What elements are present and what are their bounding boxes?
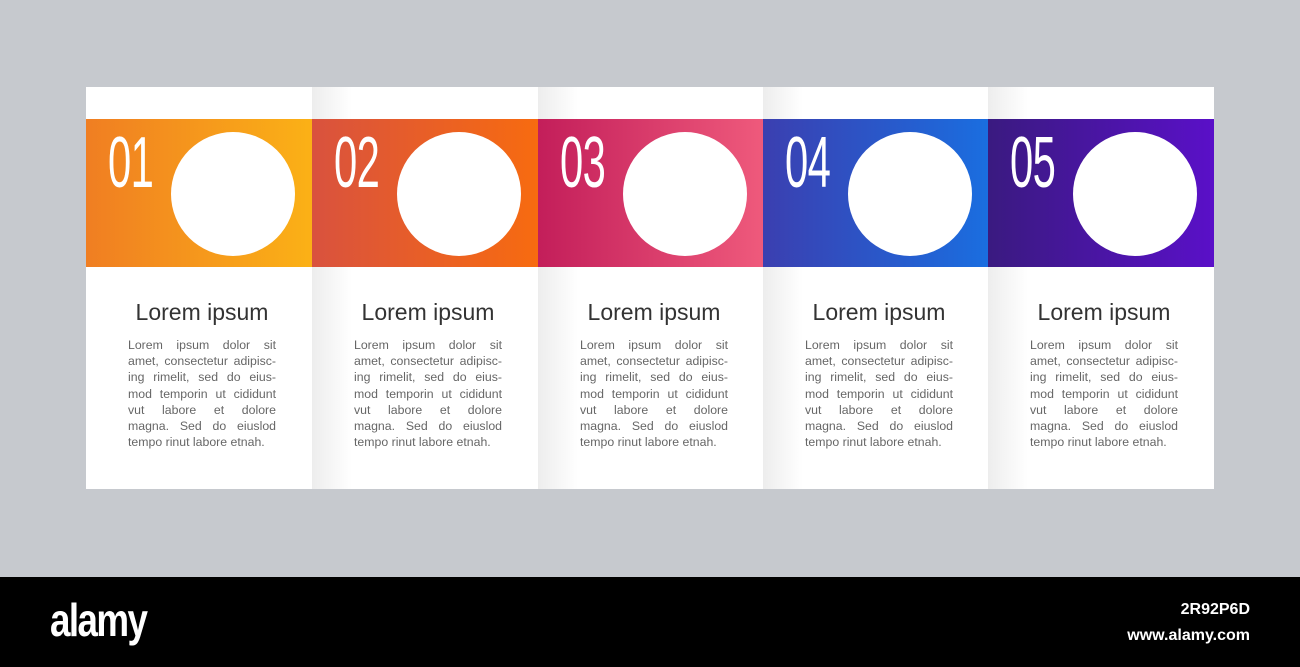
panel 4 (763, 87, 989, 489)
band 1: 01 (108, 123, 153, 203)
footer bar (0, 577, 1300, 667)
image id: www.alamy.com (1127, 627, 1250, 644)
band 2 (312, 119, 538, 267)
band 2: 02 (334, 123, 379, 203)
band 3 (538, 119, 764, 267)
panel 2 (312, 87, 538, 489)
heading 4: Lorem ipsum (813, 299, 945, 325)
image id: 2R92P6D (1181, 601, 1250, 618)
panel 3 (538, 87, 764, 489)
band 4 (763, 119, 989, 267)
heading 5: Lorem ipsum (1038, 299, 1170, 325)
text 1: Lorem ipsum dolor sit amet, consectetur adipisc-ing rimelit, sed do eius-mod temporin ut cididunt vut labore et dolore magna. Sed do eiuslod tempo rinut labore etnah. (128, 338, 276, 449)
text 4: Lorem ipsum dolor sit amet, consectetur adipisc-ing rimelit, sed do eius-mod temporin ut cididunt vut labore et dolore magna. Sed do eiuslod tempo rinut labore etnah. (805, 338, 953, 449)
panel 5 (988, 87, 1214, 489)
heading 1: Lorem ipsum (136, 299, 268, 325)
band 5 (988, 119, 1214, 267)
band 3: 03 (560, 123, 605, 203)
band 5: 05 (1010, 123, 1055, 203)
band 1 (86, 119, 312, 267)
heading 2: Lorem ipsum (362, 299, 494, 325)
panel 1 (86, 87, 312, 489)
image id (1127, 601, 1250, 644)
band 4: 04 (785, 123, 830, 203)
logo: alamy (50, 594, 146, 646)
text 3: Lorem ipsum dolor sit amet, consectetur adipisc-ing rimelit, sed do eius-mod temporin ut cididunt vut labore et dolore magna. Sed do eiuslod tempo rinut labore etnah. (580, 338, 728, 449)
text 5: Lorem ipsum dolor sit amet, consectetur adipisc-ing rimelit, sed do eius-mod temporin ut cididunt vut labore et dolore magna. Sed do eiuslod tempo rinut labore etnah. (1030, 338, 1178, 449)
text 2: Lorem ipsum dolor sit amet, consectetur adipisc-ing rimelit, sed do eius-mod temporin ut cididunt vut labore et dolore magna. Sed do eiuslod tempo rinut labore etnah. (354, 338, 502, 449)
heading 3: Lorem ipsum (588, 299, 720, 325)
